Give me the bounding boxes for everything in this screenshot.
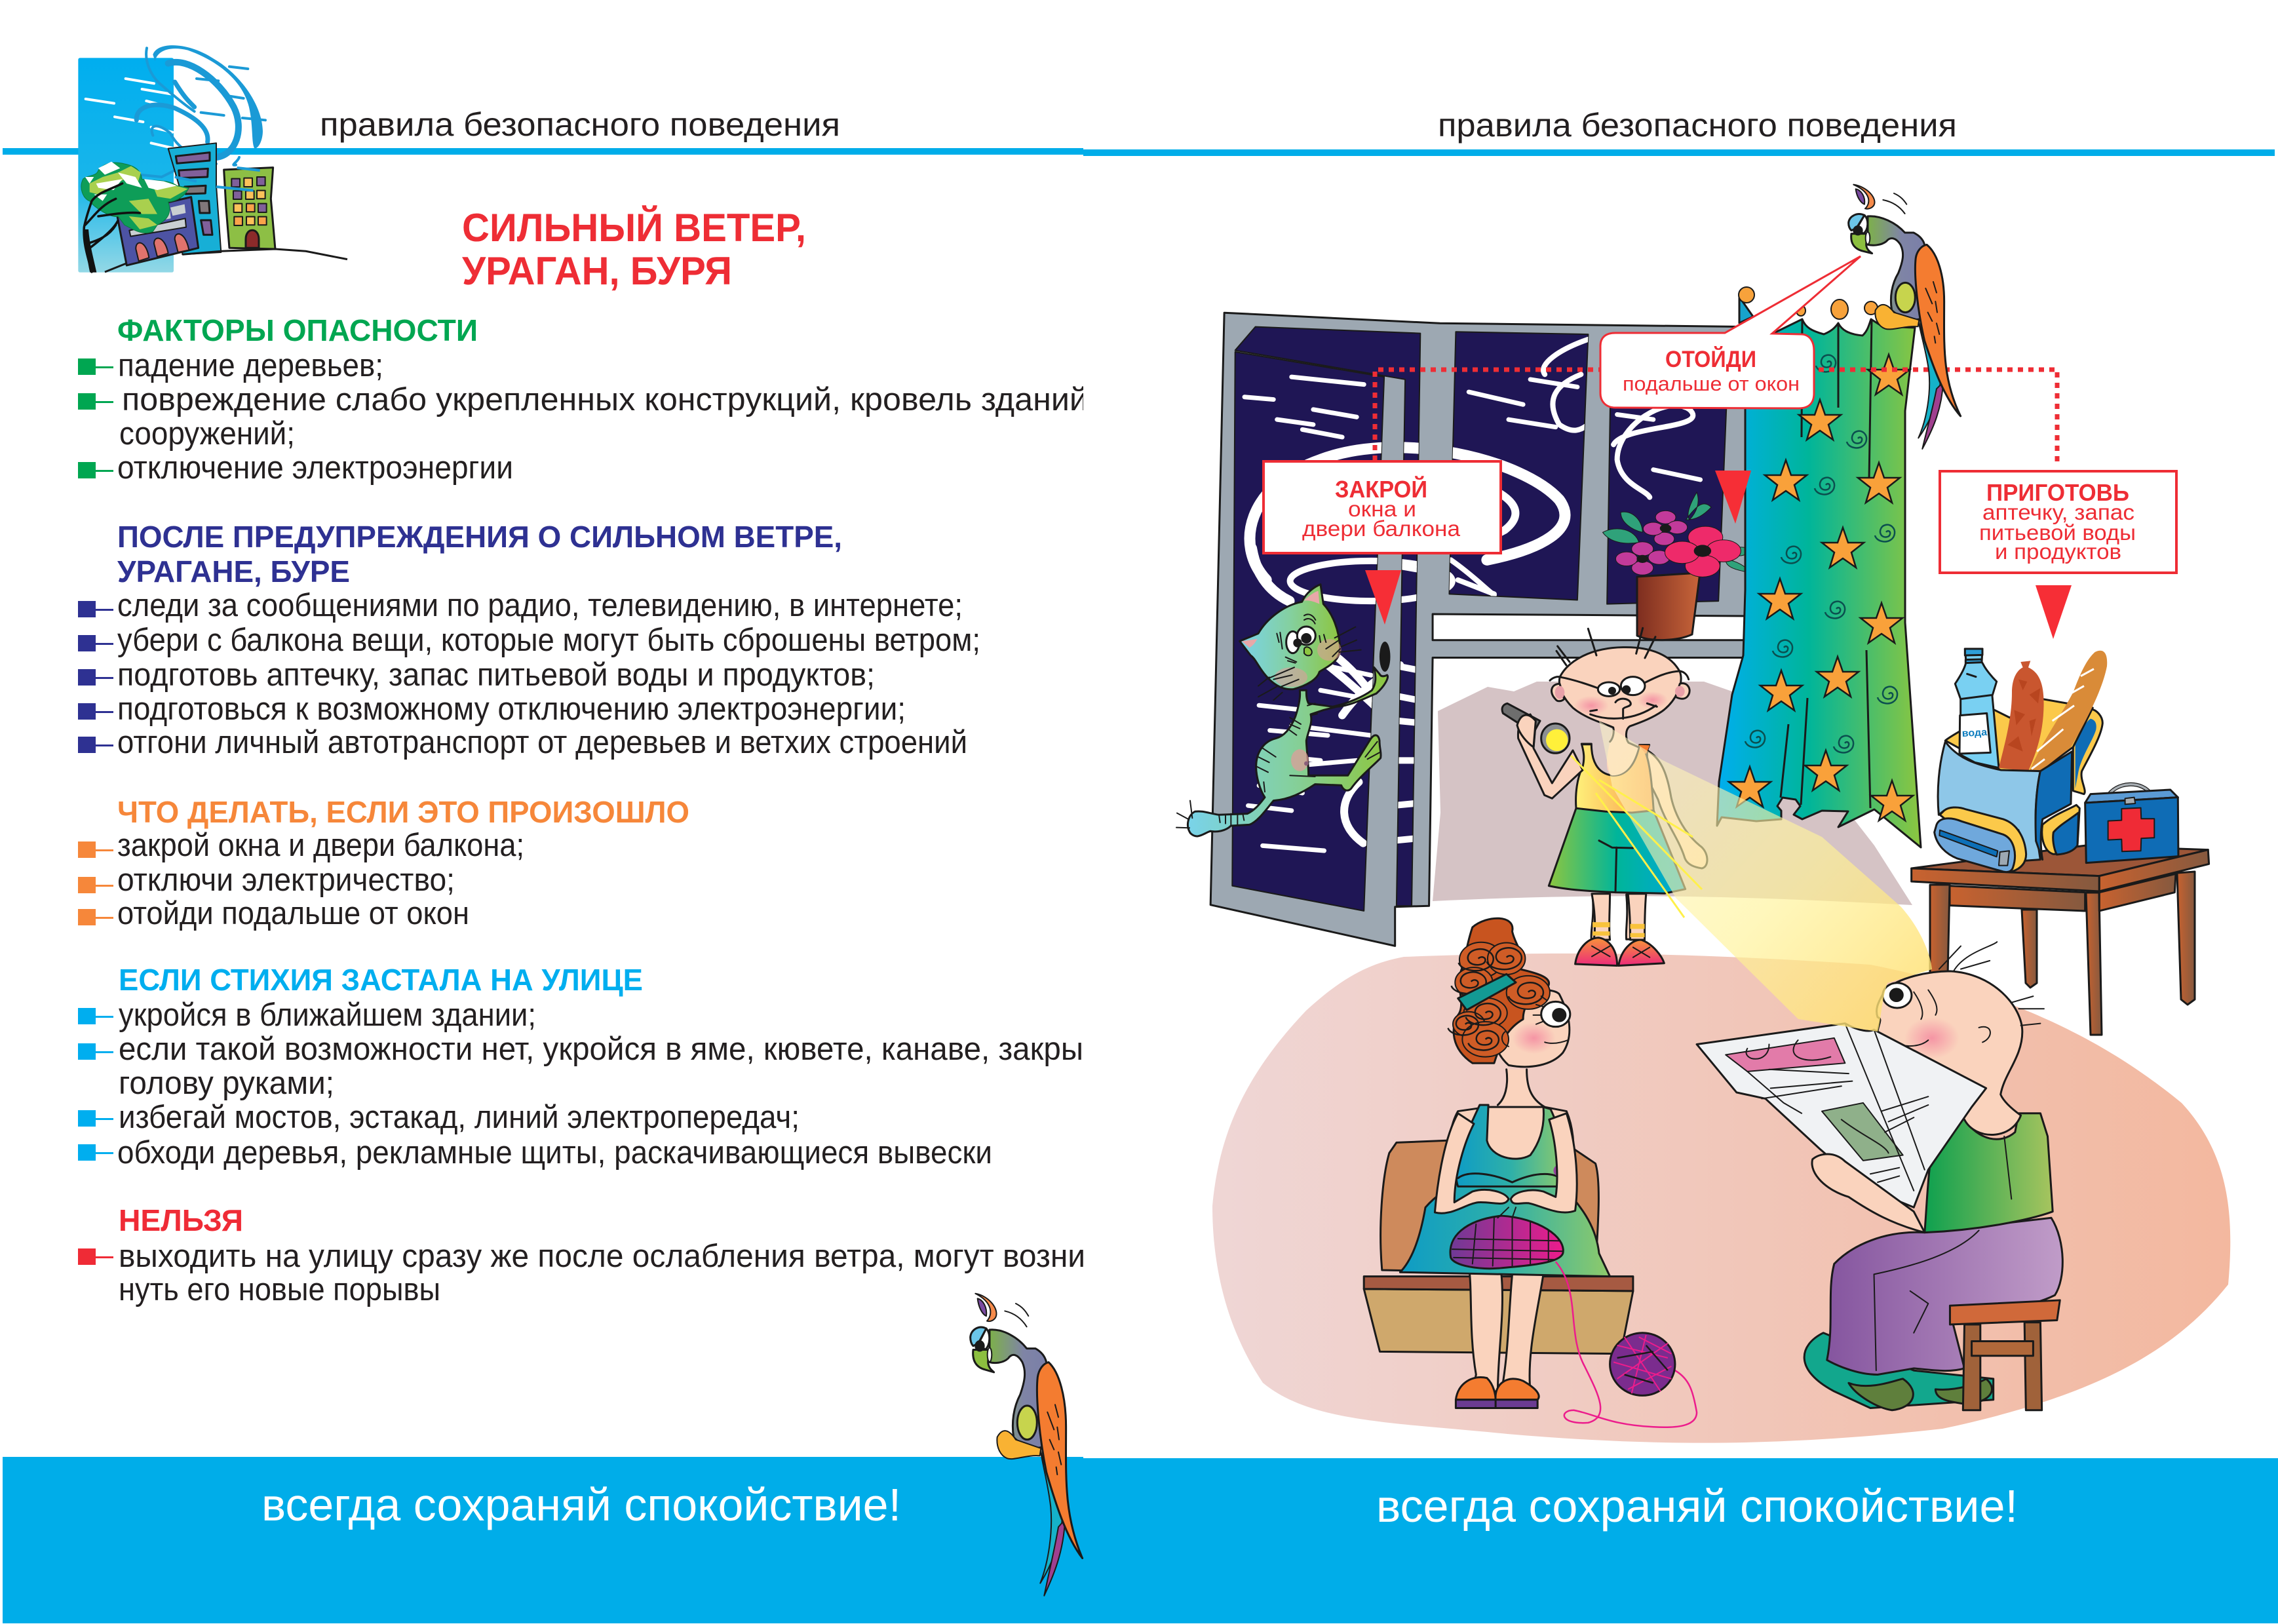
backpack with food: вода xyxy=(1961,727,1988,739)
section: what to do if it happened: ЧТО ДЕЛАТЬ, ЕСЛИ ЭТО ПРОИЗОШЛО xyxy=(117,795,689,829)
section: caught outside: если такой возможности нет, укройся в яме, кювете, канаве, закры xyxy=(119,1032,1083,1067)
section: hazard factors: отключение электроэнергии xyxy=(117,450,513,486)
dotted connector lines xyxy=(1375,370,2057,465)
section: what to do if it happened: отойди подальше от окон xyxy=(117,896,469,931)
section: hazard factors: ФАКТОРЫ ОПАСНОСТИ xyxy=(117,313,478,347)
boy with flashlight xyxy=(1502,628,1707,939)
section: after the warning: подготовь аптечку, запас питьевой воды и продуктов; xyxy=(117,657,875,693)
callout: move away speech bubble: подальше от окон xyxy=(1623,372,1800,395)
room rug xyxy=(1212,954,2230,1443)
icon: parrot on banner xyxy=(971,1294,1083,1596)
callout: close windows xyxy=(1264,461,1501,553)
header rule right xyxy=(1083,149,2275,156)
red pointer arrows xyxy=(1365,471,2072,639)
section: forbidden: выходить на улицу сразу же после ослабления ветра, могут возник xyxy=(119,1239,1100,1274)
left page header text: правила безопасного поведения xyxy=(320,106,840,143)
icon: windblown city xyxy=(78,45,347,273)
callout: close windows: ЗАКРОЙ xyxy=(1335,475,1427,503)
table top xyxy=(1912,845,2209,911)
section: hazard factors: повреждение слабо укрепленных конструкций, кровель зданий xyxy=(122,382,1088,417)
title xyxy=(462,206,806,293)
callout: prepare supplies: ПРИГОТОВЬ xyxy=(1986,479,2129,506)
slogan right: всегда сохраняй спокойствие! xyxy=(1376,1480,2018,1532)
section: after the warning: отгони личный автотранспорт от деревьев и ветхих строений xyxy=(117,725,967,760)
first aid kit xyxy=(2085,784,2178,863)
section: caught outside: укройся в ближайшем здании; xyxy=(119,997,536,1033)
section: hazard factors: падение деревьев; xyxy=(118,348,383,383)
section: caught outside: голову руками; xyxy=(119,1066,334,1101)
callout: move away speech bubble xyxy=(1600,256,1861,408)
callout: prepare supplies: питьевой воды xyxy=(1979,520,2136,545)
section: after the warning: подготовься к возможному отключению электроэнергии; xyxy=(117,691,906,727)
callout: close windows: двери балкона xyxy=(1302,516,1461,541)
title: СИЛЬНЫЙ ВЕТЕР, xyxy=(462,206,806,250)
yarn ball and thread xyxy=(1556,1262,1697,1427)
section: after the warning: ПОСЛЕ ПРЕДУПРЕЖДЕНИЯ О СИЛЬНОМ ВЕТРЕ, xyxy=(117,520,842,554)
section: after the warning xyxy=(78,520,980,760)
header rule left xyxy=(3,148,1083,155)
flower pot xyxy=(1603,492,1751,640)
cat on door xyxy=(1176,585,1387,836)
stool xyxy=(1950,1300,2060,1410)
backpack with food xyxy=(1935,649,2107,872)
curtain xyxy=(1717,287,1921,847)
bottom banner left xyxy=(3,1457,1083,1623)
section: after the warning: УРАГАНЕ, БУРЕ xyxy=(117,554,350,589)
callout: prepare supplies: аптечку, запас xyxy=(1982,500,2134,524)
section: what to do if it happened xyxy=(78,795,689,931)
section: forbidden: НЕЛЬЗЯ xyxy=(119,1203,243,1237)
section: caught outside: обходи деревья, рекламные щиты, раскачивающиеся вывески xyxy=(117,1135,992,1170)
section: after the warning: следи за сообщениями по радио, телевидению, в интернете; xyxy=(117,588,963,623)
woman knitting xyxy=(1364,918,1633,1408)
bag, food and first aid kit on table xyxy=(1912,649,2209,1035)
section: forbidden xyxy=(78,1203,1100,1307)
section: hazard factors xyxy=(78,313,1088,486)
boy legs and shoes xyxy=(1575,894,1664,966)
section: what to do if it happened: закрой окна и двери балкона; xyxy=(117,828,524,863)
section: hazard factors: сооружений; xyxy=(119,416,295,452)
section: forbidden: нуть его новые порывы xyxy=(119,1272,440,1307)
man reading newspaper xyxy=(1697,942,2062,1410)
table legs xyxy=(1930,872,2195,1035)
section: caught outside: ЕСЛИ СТИХИЯ ЗАСТАЛА НА УЛИЦЕ xyxy=(119,963,643,997)
section: caught outside xyxy=(78,963,1083,1170)
flashlight beam xyxy=(1571,721,1932,1032)
callout: close windows: окна и xyxy=(1348,497,1416,521)
callout: prepare supplies: и продуктов xyxy=(1995,539,2121,564)
section: what to do if it happened: отключи электричество; xyxy=(117,862,455,898)
section: after the warning: убери с балкона вещи, которые могут быть сброшены ветром; xyxy=(117,623,980,658)
slogan left: всегда сохраняй спокойствие! xyxy=(261,1479,901,1530)
window and balcony door xyxy=(1210,313,1747,946)
bottom banner right xyxy=(1083,1458,2278,1623)
floor patch by window xyxy=(1433,682,1912,905)
title: УРАГАН, БУРЯ xyxy=(462,249,732,293)
callout: prepare supplies xyxy=(1940,471,2176,573)
parrot on curtain xyxy=(1849,185,1961,449)
callout: move away speech bubble: ОТОЙДИ xyxy=(1665,346,1756,372)
right page header text: правила безопасного поведения xyxy=(1438,107,1957,144)
section: caught outside: избегай мостов, эстакад, линий электропередач; xyxy=(119,1100,800,1135)
